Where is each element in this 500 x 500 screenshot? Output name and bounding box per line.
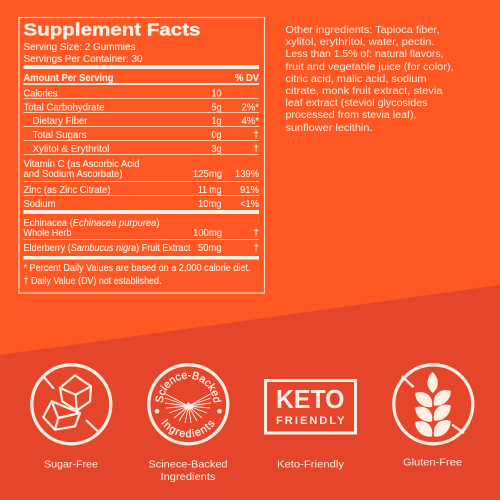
table rows: Vitamin C (as Ascorbic Acid <box>24 158 140 170</box>
table header <box>24 72 259 84</box>
table rows: 5g <box>212 102 222 114</box>
table rows: † <box>253 143 259 155</box>
herbal rows: Echinacea (Echinacea purpurea) <box>24 217 160 229</box>
table rows: † <box>253 129 259 141</box>
serving info: Servings Per Container: 30 <box>24 53 143 65</box>
table rows: Total Sugars <box>32 129 86 141</box>
serving info <box>24 41 143 65</box>
background: lower red diagonal band <box>0 285 500 500</box>
table rows: 4%* <box>242 115 259 127</box>
label: sugar-free: Sugar-Free <box>44 460 98 470</box>
serving info: Serving Size: 2 Gummies <box>24 41 136 53</box>
label: science-backed: Scinece-Backed <box>148 460 228 470</box>
heading: Supplement Facts: Supplement Facts <box>24 20 201 40</box>
table rows: 2%* <box>242 102 259 114</box>
table rows: and Sodium Ascorbate) <box>24 168 122 180</box>
table rows: <1% <box>240 198 259 210</box>
icon: science-backed seal: Science-Backed <box>156 371 222 403</box>
herbal rows: 50mg <box>198 242 222 254</box>
text block: other ingredients: sunflower lecithin. <box>286 123 372 134</box>
text block: other ingredients: citrate, monk fruit extract, stevia <box>286 86 443 97</box>
footnotes <box>24 262 250 287</box>
table rows: 0g <box>212 129 222 141</box>
text block: other ingredients: fruit and vegetable juice (for color), <box>286 62 454 73</box>
label: science-backed <box>148 460 228 483</box>
thick rule <box>24 65 259 69</box>
label: gluten-free: Gluten-Free <box>403 458 462 468</box>
table rows: 139% <box>235 168 259 180</box>
panel: supplement facts <box>19 18 264 293</box>
table rows: Dietary Fiber <box>32 115 88 127</box>
table rows: 3g <box>212 143 222 155</box>
herbal rows: Elderberry (Sambucus nigra) Fruit Extract <box>24 242 191 254</box>
table rows: 125mg <box>193 168 222 180</box>
icon: science-backed seal <box>147 363 230 446</box>
table rows: Calories <box>24 88 58 100</box>
label: science-backed: Ingredients <box>160 472 216 483</box>
table rows: Sodium <box>24 198 56 210</box>
text block: other ingredients: processed from stevia leaf), <box>286 110 416 121</box>
footnotes: † Daily Value (DV) not established. <box>24 275 162 287</box>
table header: % DV <box>235 72 259 84</box>
herbal rows: 100mg <box>193 227 222 239</box>
icon: science-backed seal: Ingredients <box>161 418 214 438</box>
footnotes: * Percent Daily Values are based on a 2,000 calorie diet. <box>24 262 250 274</box>
text block: other ingredients: Other ingredients: Tapioca fiber, <box>286 25 440 36</box>
icon: keto friendly badge <box>266 380 356 433</box>
thick rule <box>24 256 259 260</box>
herbal rows: Whole Herb <box>24 227 72 239</box>
table rows: 1g <box>212 115 222 127</box>
table header: Amount Per Serving <box>24 72 114 84</box>
wheat grains <box>415 372 451 437</box>
table rows: 91% <box>240 184 259 196</box>
icon: keto friendly badge: FRIENDLY <box>276 415 345 427</box>
text block: other ingredients: xylitol, erythritol, water, pectin. <box>286 37 434 48</box>
label: keto-friendly: Keto-Friendly <box>277 460 344 470</box>
icon: sugar-free <box>32 365 111 444</box>
table rows: Zinc (as Zinc Citrate) <box>24 184 110 196</box>
text block: other ingredients <box>286 25 454 134</box>
icon: keto friendly badge: KETO <box>276 384 344 414</box>
table rows: 10mg <box>198 198 222 210</box>
table rows: Xylitol & Erythritol <box>32 143 110 155</box>
icon: gluten-free <box>394 365 473 444</box>
herbal rows: † <box>253 242 259 254</box>
table rows: 10 <box>212 88 222 100</box>
text block: other ingredients: citric acid, malic acid, sodium <box>286 74 426 85</box>
text block: other ingredients: Less than 1.5% of: natural flavors, <box>286 49 444 60</box>
herbal rows <box>24 217 259 254</box>
table rows: Total Carbohydrate <box>24 102 105 114</box>
herbal rows: † <box>253 227 259 239</box>
thick rule <box>24 210 259 214</box>
table rows: 11 mg <box>198 184 222 196</box>
rays <box>165 394 211 423</box>
text block: other ingredients: leaf extract (steviol glycosides <box>286 98 428 109</box>
table rows <box>24 88 259 210</box>
